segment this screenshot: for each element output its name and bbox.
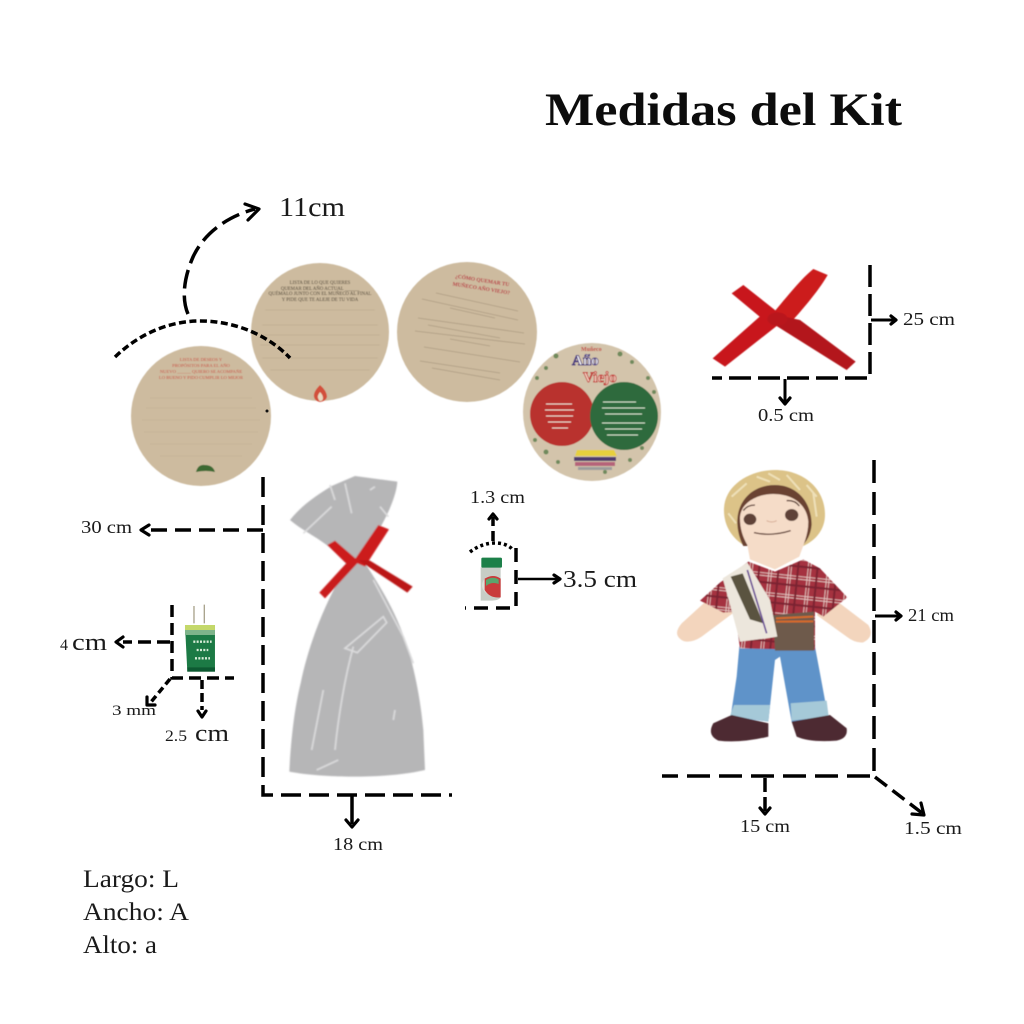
ruana sash xyxy=(723,563,777,642)
disc 2: list, dark heading: QUÉMALO JUNTO CON EL MUÑECO AL FINAL xyxy=(269,291,372,297)
legend: dimension key: Alto: a xyxy=(83,932,157,959)
stray dot on disc xyxy=(266,410,268,412)
ribbon measures: 25 cm and 0.5 cm: 0.5 cm xyxy=(758,405,814,425)
tea box measures: 4 cm, 3 mm, 2.5 cm xyxy=(60,605,234,747)
disc 3: instructions: MUÑECO AÑO VIEJO? xyxy=(452,280,511,297)
doll measures: 21 cm, 15 cm, 1.5 cm: 21 cm xyxy=(908,605,954,625)
disc 1: wish list, red heading: LO BUENO Y PIDO CUMPLIR LO MEJOR xyxy=(159,375,244,380)
bottle measures: 1.3 cm and 3.5 cm xyxy=(465,487,637,608)
title: Medidas del Kit xyxy=(545,84,902,136)
nose xyxy=(767,521,777,522)
disc 3: instructions: ¿CÓMO QUEMAR TU xyxy=(455,272,510,288)
arc measure: 11cm xyxy=(115,192,345,358)
disc 3: instructions xyxy=(397,262,537,402)
legend: dimension key: Ancho: A xyxy=(83,899,189,926)
tea box measures: 4 cm, 3 mm, 2.5 cm: 2.5 xyxy=(165,728,187,745)
doll measures: 21 cm, 15 cm, 1.5 cm xyxy=(662,460,962,838)
bag measures: 30 cm and 18 cm: 18 cm xyxy=(333,834,383,854)
tea box measures: 4 cm, 3 mm, 2.5 cm: 3 mm xyxy=(112,703,156,719)
tea box measures: 4 cm, 3 mm, 2.5 cm: cm xyxy=(195,721,229,747)
mouth xyxy=(754,531,791,534)
doll measures: 21 cm, 15 cm, 1.5 cm: 15 cm xyxy=(740,816,790,836)
disc 4: cover, Muñeco Año Viejo xyxy=(523,343,661,481)
shoes xyxy=(711,715,768,741)
disc 1: wish list, red heading xyxy=(131,346,271,486)
disc 4: cover, Muñeco Año Viejo: Año xyxy=(572,353,599,369)
gift bag with red ribbon xyxy=(289,476,425,777)
trouser cuffs xyxy=(730,701,829,722)
disc 2: list, dark heading: QUEMAR DEL AÑO ACTUAL ______ xyxy=(281,286,360,292)
bag measures: 30 cm and 18 cm: 30 cm xyxy=(81,517,132,537)
doll measures: 21 cm, 15 cm, 1.5 cm: 1.5 cm xyxy=(904,818,962,838)
straw hat xyxy=(724,470,825,546)
red ribbon bow xyxy=(713,269,856,370)
shirt xyxy=(700,559,847,650)
disc 1: wish list, red heading: LISTA DE DESEOS Y xyxy=(180,357,223,362)
belt pouch xyxy=(773,612,814,651)
bag measures: 30 cm and 18 cm xyxy=(81,477,452,854)
bottle measures: 1.3 cm and 3.5 cm: 1.3 cm xyxy=(470,487,525,507)
legend: dimension key: Largo: L xyxy=(83,866,179,893)
eyes xyxy=(744,514,756,525)
disc 2: list, dark heading xyxy=(251,263,389,402)
ribbon measures: 25 cm and 0.5 cm xyxy=(712,265,955,425)
disc 4: cover, Muñeco Año Viejo: Viejo xyxy=(583,370,617,386)
tea box measures: 4 cm, 3 mm, 2.5 cm: 4 xyxy=(60,637,68,654)
disc 1: wish list, red heading: PROPÓSITOS PARA EL AÑO xyxy=(172,363,231,368)
neck and head xyxy=(740,494,808,569)
right arm xyxy=(817,598,871,642)
legend: dimension key xyxy=(83,866,189,959)
bottle measures: 1.3 cm and 3.5 cm: 3.5 cm xyxy=(563,566,637,593)
small tea box xyxy=(185,605,215,672)
trousers xyxy=(731,647,828,722)
rag doll with straw hat xyxy=(677,470,871,741)
brows xyxy=(743,501,799,511)
arc measure: 11cm: 11cm xyxy=(279,192,345,222)
disc 4: cover, Muñeco Año Viejo: Muñeco xyxy=(581,347,602,353)
disc 2: list, dark heading: Y PIDE QUE TE ALEJE DE TU VIDA xyxy=(282,298,359,303)
ribbon measures: 25 cm and 0.5 cm: 25 cm xyxy=(903,309,955,329)
tea box measures: 4 cm, 3 mm, 2.5 cm: cm xyxy=(72,630,107,656)
small bottle xyxy=(481,558,502,601)
disc 1: wish list, red heading: NUEVO ______ QUIERO SE ACOMPAÑE xyxy=(160,369,242,374)
disc 2: list, dark heading: LISTA DE LO QUE QUIERES xyxy=(290,281,351,286)
left arm xyxy=(677,588,735,642)
hair xyxy=(737,485,812,546)
